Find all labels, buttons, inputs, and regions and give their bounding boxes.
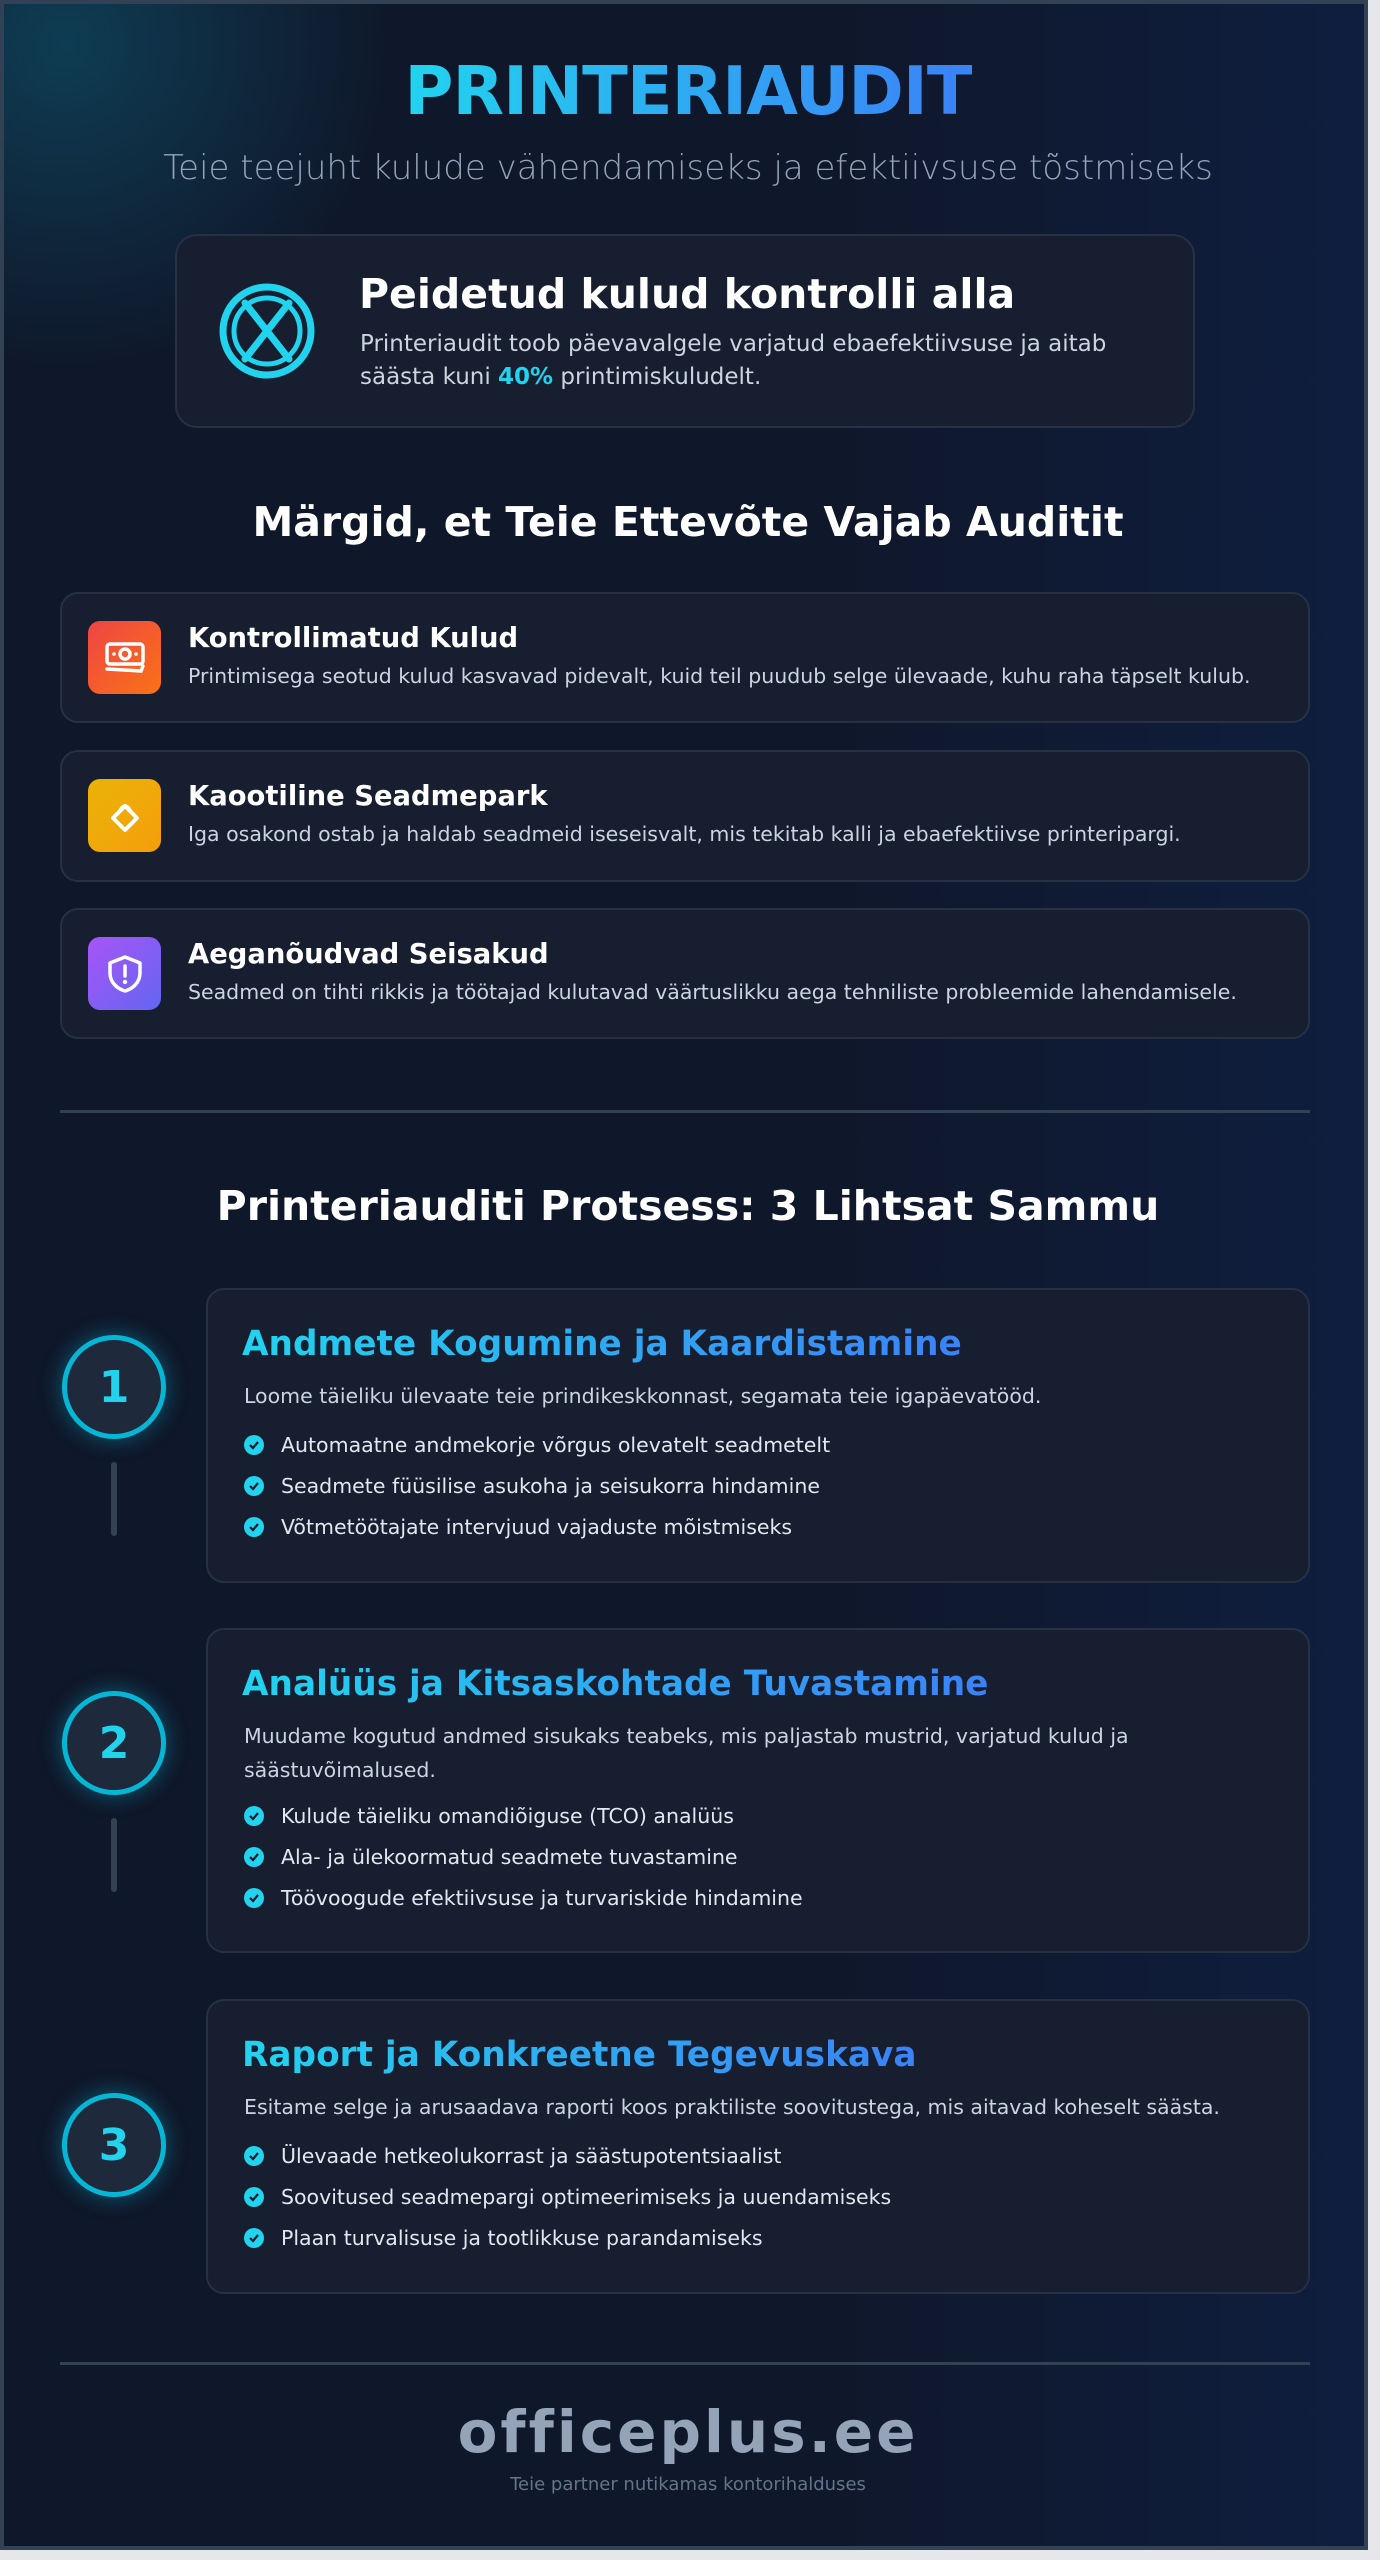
- panel: step 2: Muudame kogutud andmed sisukaks teabeks, mis paljastab mustrid, varjatud kulud ja: [244, 1724, 1129, 1748]
- panel: step 1: Seadmete füüsilise asukoha ja seisukorra hindamine: [281, 1474, 820, 1498]
- hero text: [360, 331, 1106, 390]
- panel: sign 1: Printimisega seotud kulud kasvavad pidevalt, kuid teil puudub selge ülevaade, kuhu raha täpselt kulub.: [188, 664, 1251, 688]
- icon: tag: [88, 779, 161, 852]
- panel: step 2: säästuvõimalused.: [244, 1758, 436, 1782]
- step 3 number: [62, 2093, 166, 2197]
- title: PRINTERIAUDIT: [404, 52, 972, 130]
- panel: step 1: Automaatne andmekorje võrgus olevatelt seadmetelt: [281, 1433, 830, 1457]
- section heading: process: Printeriauditi Protsess: 3 Lihtsat Sammu: [217, 1182, 1159, 1230]
- step 1 number: 1: [99, 1362, 129, 1412]
- subtitle: Teie teejuht kulude vähendamiseks ja efektiivsuse tõstmiseks: [163, 148, 1213, 188]
- hero text: säästa kuni 40% printimiskuludelt.: [360, 364, 761, 390]
- panel: sign 3: Seadmed on tihti rikkis ja töötajad kulutavad väärtuslikku aega tehniliste probleemide lahendamisele.: [188, 980, 1237, 1004]
- panel: sign 2: Iga osakond ostab ja haldab seadmeid iseseisvalt, mis tekitab kalli ja ebaefektiivse printeripargi.: [188, 822, 1181, 846]
- hero card: [175, 234, 1195, 428]
- hero heading: Peidetud kulud kontrolli alla: [359, 270, 1015, 318]
- step 2 number: 2: [99, 1718, 129, 1768]
- panel: sign 2: Kaootiline Seadmepark: [188, 781, 548, 812]
- section heading: signs: Märgid, et Teie Ettevõte Vajab Auditit: [252, 498, 1124, 546]
- panel: step 1: Loome täieliku ülevaate teie prindikeskkonnast, segamata teie igapäevatööd.: [244, 1384, 1041, 1408]
- panel: step 3: Ülevaade hetkeolukorrast ja säästupotentsiaalist: [281, 2144, 781, 2168]
- panel: sign 3: [60, 908, 1310, 1039]
- panel: step 2: Analüüs ja Kitsaskohtade Tuvastamine: [242, 1664, 988, 1704]
- icon: shield: [88, 937, 161, 1010]
- step 3 number: 3: [99, 2120, 129, 2170]
- panel: step 3: [206, 1999, 1310, 2294]
- panel: sign 1: [60, 592, 1310, 723]
- panel: sign 3: Aeganõudvad Seisakud: [188, 939, 549, 970]
- panel: step 3: Soovitused seadmepargi optimeerimiseks ja uuendamiseks: [281, 2185, 891, 2209]
- footer tagline: Teie partner nutikamas kontorihalduses: [510, 2474, 866, 2495]
- panel: step 1: Võtmetöötajate intervjuud vajaduste mõistmiseks: [281, 1515, 792, 1539]
- panel: step 2: Kulude täieliku omandiõiguse (TCO) analüüs: [281, 1804, 734, 1828]
- panel: step 1: [206, 1288, 1310, 1583]
- panel: step 3: Raport ja Konkreetne Tegevuskava: [242, 2035, 917, 2075]
- hero text: Printeriaudit toob päevavalgele varjatud ebaefektiivsuse ja aitab: [360, 331, 1106, 357]
- panel: step 2: [206, 1628, 1310, 1953]
- icon: crossed circle: [220, 284, 314, 378]
- step 1 number: [62, 1335, 166, 1439]
- icon: money: [88, 621, 161, 694]
- footer brand: officeplus.ee: [458, 2398, 918, 2466]
- panel: sign 2: [60, 750, 1310, 882]
- panel: step 3: Plaan turvalisuse ja tootlikkuse parandamiseks: [281, 2226, 763, 2250]
- panel: step 3: Esitame selge ja arusaadava raporti koos praktiliste soovitustega, mis aitavad koheselt säästa.: [244, 2095, 1220, 2119]
- step 2 number: [62, 1691, 166, 1795]
- panel: step 1: Andmete Kogumine ja Kaardistamine: [242, 1324, 962, 1364]
- panel: step 2: Töövoogude efektiivsuse ja turvariskide hindamine: [281, 1886, 803, 1910]
- panel: sign 1: Kontrollimatud Kulud: [188, 623, 518, 654]
- panel: step 2: Ala- ja ülekoormatud seadmete tuvastamine: [281, 1845, 738, 1869]
